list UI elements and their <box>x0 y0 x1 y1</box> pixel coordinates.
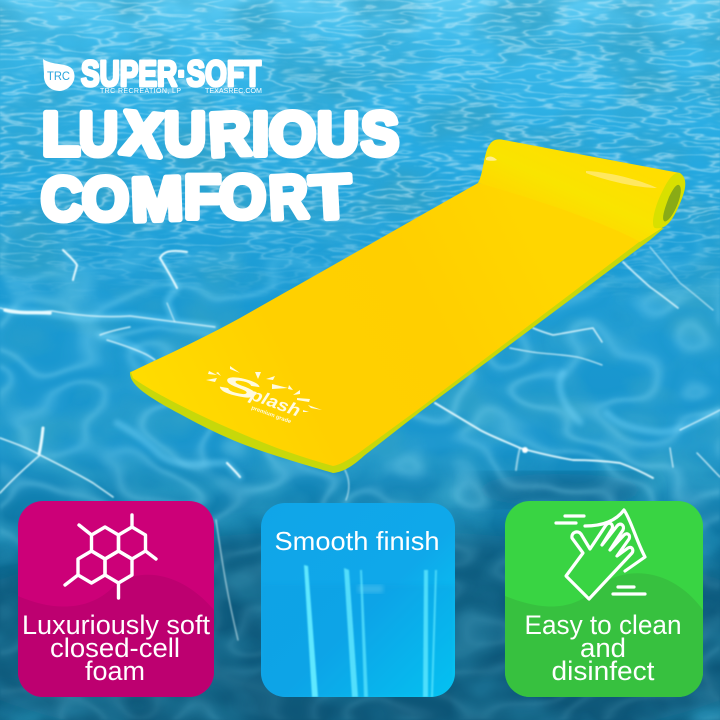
title line 1: O <box>269 100 316 168</box>
icon: honeycomb molecule <box>65 515 156 598</box>
wordmark: SUPER·SOFT <box>81 53 261 94</box>
panel text <box>524 610 682 686</box>
pillow hole <box>663 185 681 221</box>
title line 1: X <box>118 98 167 170</box>
panel text: closed-cell <box>50 633 180 663</box>
splash logo: S <box>217 368 264 407</box>
panel text: and <box>580 633 626 663</box>
logo subtext: TRC RECREATION, LP <box>100 88 181 95</box>
brand logo <box>43 53 262 95</box>
mat top surface <box>131 183 664 466</box>
panel text: Easy to clean <box>524 610 682 640</box>
pillow highlights <box>586 171 657 188</box>
title line 1: L <box>42 100 80 168</box>
title line 2: R <box>267 162 310 232</box>
pillow roll <box>478 139 681 242</box>
pool float mat <box>130 139 685 473</box>
title line 1: U <box>79 100 118 168</box>
panel text <box>22 610 210 686</box>
icon: TRC droplet <box>43 59 75 91</box>
foam surface reflections <box>303 564 455 697</box>
logo web address: TEXASREC.COM <box>205 88 262 95</box>
panel text: Smooth finish <box>274 526 440 556</box>
title line 2: M <box>130 164 184 234</box>
title line 1: U <box>164 100 206 168</box>
title line 2: T <box>308 162 353 232</box>
splash logo <box>206 366 322 425</box>
title line 2: F <box>184 163 221 231</box>
splash logo: premium grade <box>250 405 292 425</box>
title line 2: C <box>41 165 83 233</box>
title line 1: R <box>207 99 253 169</box>
title line 1: U <box>317 100 359 168</box>
title line 2: O <box>219 163 266 231</box>
title line 1: I <box>252 100 269 168</box>
pillow end ring <box>653 173 685 228</box>
panel: easy to clean <box>505 501 703 697</box>
splash logo: plash <box>247 385 303 421</box>
soft glow around light lines <box>0 258 720 477</box>
panel text: foam <box>85 656 145 686</box>
panel text: Luxuriously soft <box>22 610 210 640</box>
mat side edge <box>130 228 664 473</box>
title line 1 <box>42 98 399 170</box>
icon: hand wiping with cloth <box>556 510 645 599</box>
title line 1: S <box>361 100 399 168</box>
bright caustic lines <box>0 247 720 640</box>
title line 2: O <box>82 165 129 233</box>
panel text: disinfect <box>552 656 655 686</box>
panel: smooth finish <box>261 503 455 697</box>
panel: closed-cell foam <box>18 501 214 697</box>
title <box>41 98 399 234</box>
icon: TRC droplet: TRC <box>47 69 70 83</box>
title line 2 <box>41 162 353 234</box>
